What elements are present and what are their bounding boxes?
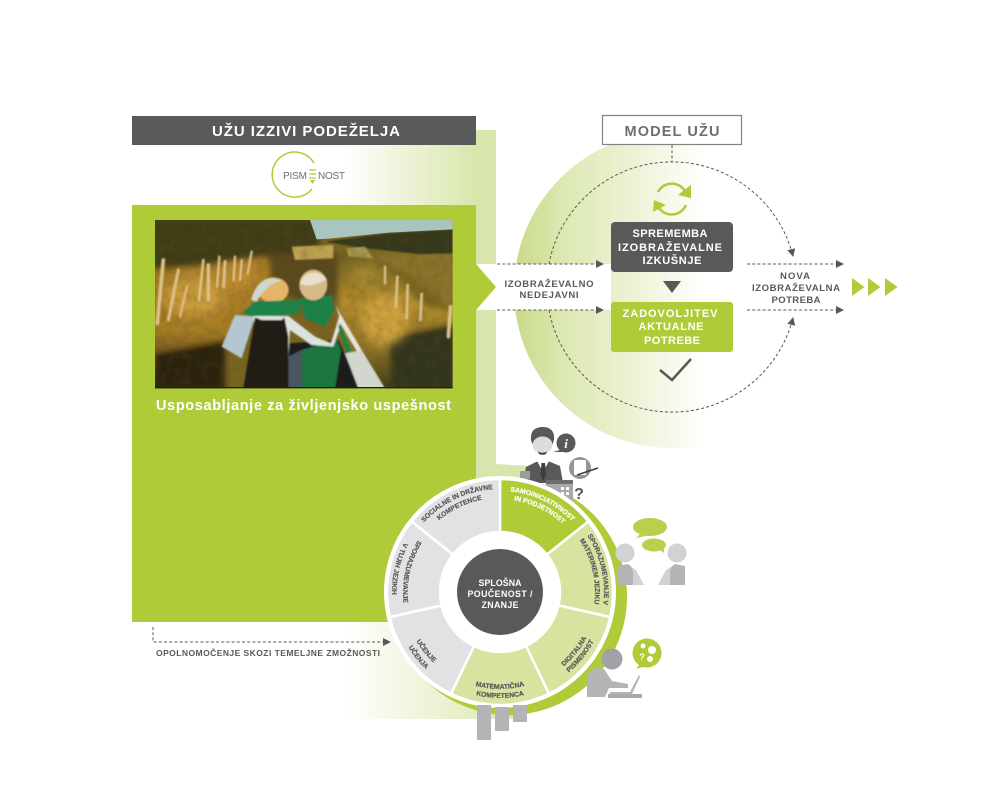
fence posts (157, 252, 451, 337)
box: zadovoljitev: POTREBE (644, 335, 700, 347)
wheel labels: SPORAZUMEVANJE (402, 540, 422, 603)
white band (476, 264, 611, 310)
light green strip and gradients behind panels (345, 130, 530, 719)
wheel labels: V TUJIH JEZIKIH (392, 544, 408, 594)
icon: person at laptop (587, 638, 662, 698)
icon: businessman with calendar and info: i (564, 436, 568, 451)
photo: two friends walking on a rural path (152, 217, 455, 392)
icon: refresh cycle (653, 184, 691, 215)
green arrow out of panel (476, 264, 496, 310)
model box (602, 116, 742, 144)
wedge: učenje učenja (390, 605, 474, 694)
wheel labels: SOCIALNE IN DRŽAVNE (421, 484, 493, 522)
wedge: sporazumevanje v tujih jezikih (387, 522, 453, 617)
wheel labels: DIGITALNA (561, 637, 587, 666)
box: zadovoljitev: ZADOVOLJITEV (622, 308, 718, 320)
wheel labels (392, 484, 609, 698)
wedge: samoiniciativnost (500, 479, 588, 555)
box: sprememba: IZOBRAŽEVALNE (618, 241, 722, 254)
box: zadovoljitev: AKTUALNE (638, 321, 704, 333)
label: izobraževalno nedejavni (504, 278, 594, 301)
wheel labels: UČENJE (417, 638, 437, 663)
label: nova izobraževalna potreba: IZOBRAŽEVALNA (752, 282, 840, 294)
connector dash (671, 145, 673, 162)
photo caption: Usposabljanje za življenjsko uspešnost (156, 398, 451, 414)
label: izobraževalno nedejavni: NEDEJAVNI (520, 290, 578, 301)
arrow down (663, 281, 681, 293)
dashed flow arrows (497, 264, 843, 310)
chart: competence wheel (384, 476, 616, 708)
label: nova izobraževalna potreba (752, 271, 840, 306)
icon: check mark (660, 359, 691, 380)
icon: person at laptop: ? (639, 652, 645, 662)
icon: businessman with calendar and info (520, 427, 598, 503)
wheel centre: splošna poučenost / znanje: POUČENOST / (468, 588, 533, 599)
wedge: digitalna pismenost (526, 605, 610, 694)
box: sprememba (611, 222, 733, 272)
wheel labels: SPORAZUMEVANJE V (588, 534, 609, 606)
wheel labels: IN PODJETNOST (514, 496, 566, 524)
box: sprememba: SPREMEMBA (632, 228, 708, 240)
label: nova izobraževalna potreba: POTREBA (772, 295, 821, 306)
model disc gradient (514, 132, 830, 448)
icon: bar chart (477, 705, 527, 740)
wedge: sporazumevanje v maternem jeziku (547, 522, 613, 617)
wheel labels: MATERINEM JEZIKU (580, 538, 600, 604)
wedge: matematična kompetenca (451, 646, 549, 705)
header: UŽU izzivi podeželja (132, 116, 476, 145)
box: zadovoljitev (611, 302, 733, 352)
wheel labels: KOMPETENCA (476, 690, 524, 698)
dashed cycle circle (549, 162, 793, 412)
header: UŽU izzivi podeželja: UŽU IZZIVI PODEŽELJA (212, 122, 400, 140)
bottom dashed arrow (153, 627, 390, 642)
label: opolnomočenje: OPOLNOMOČENJE SKOZI TEMELJNE ZMOŽNOSTI (156, 647, 380, 658)
logo: pismenost (272, 152, 345, 197)
wheel centre: splošna poučenost / znanje: ZNANJE (482, 600, 519, 610)
model box: MODEL UŽU (624, 122, 720, 140)
label: izobraževalno nedejavni: IZOBRAŽEVALNO (504, 278, 594, 290)
panel: green training panel (132, 205, 476, 622)
wheel labels: SAMOINICIATIVNOST (510, 487, 576, 520)
wheel labels: UČENJA (409, 645, 428, 669)
logo: pismenost: PISM (283, 171, 307, 182)
green crescent behind wheel (391, 479, 627, 715)
wheel centre: splošna poučenost / znanje: SPLOŠNA (478, 577, 522, 588)
wheel labels: PISMENOST (566, 639, 594, 672)
arrows: three green chevrons (852, 278, 898, 296)
figures (222, 270, 385, 388)
icon: businessman with calendar and info: ? (574, 486, 584, 503)
wedge: socialne in državne kompetence (412, 479, 500, 555)
wheel centre: splošna poučenost / znanje (457, 549, 543, 635)
icon: two people talking (616, 518, 686, 585)
wheel labels: MATEMATIČNA (476, 681, 524, 690)
label: nova izobraževalna potreba: NOVA (780, 271, 810, 282)
logo: pismenost: NOST (318, 171, 345, 182)
wheel labels: KOMPETENCE (436, 495, 482, 520)
box: sprememba: IZKUŠNJE (642, 254, 702, 267)
